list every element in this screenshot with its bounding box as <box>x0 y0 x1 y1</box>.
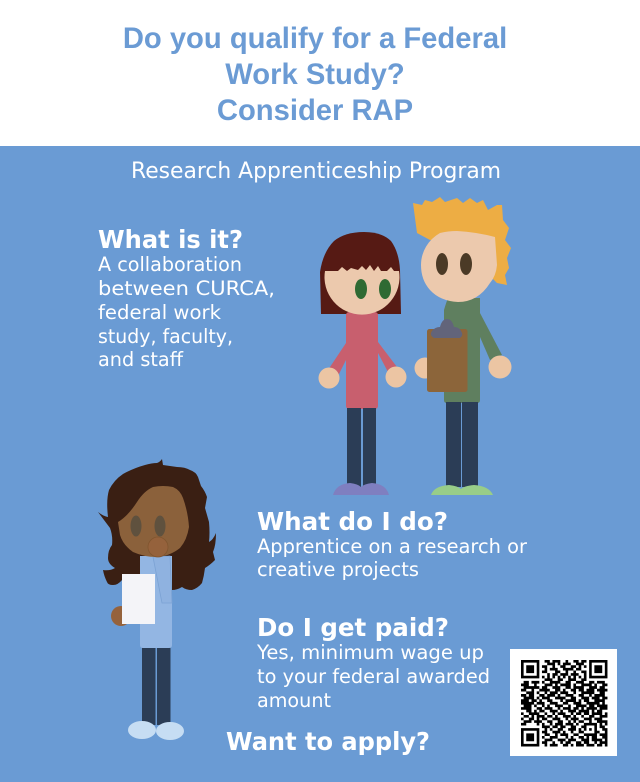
text block: what is it: A collaboration <box>98 253 242 276</box>
text block: what is it: What is it? <box>98 225 243 254</box>
paper <box>122 574 155 624</box>
illustration: woman in red sweater <box>318 232 406 495</box>
text block: do I get paid <box>256 613 490 712</box>
text block: what is it: and staff <box>98 348 184 371</box>
text block: what do I do: Apprentice on a research or <box>257 535 528 558</box>
title: Consider RAP <box>217 95 413 127</box>
icon: clipboard <box>427 319 468 392</box>
illustration: man with clipboard <box>413 197 512 495</box>
QR code <box>510 649 617 756</box>
subtitle: Research Apprenticeship Program <box>131 159 501 184</box>
text block: what is it: federal work <box>98 301 222 324</box>
heading: want to apply: Want to apply? <box>226 727 430 756</box>
text block: what do I do: creative projects <box>257 558 419 581</box>
text block: what do I do <box>257 507 528 581</box>
title: Do you qualify for a Federal <box>123 23 507 55</box>
title <box>123 23 507 127</box>
text block: do I get paid: amount <box>257 689 331 712</box>
text block: do I get paid: to your federal awarded <box>257 665 490 688</box>
text block: what is it <box>98 225 275 371</box>
text block: do I get paid: Do I get paid? <box>257 613 449 642</box>
illustration: woman holding paper <box>98 459 216 740</box>
text block: what do I do: What do I do? <box>257 507 448 536</box>
title: Work Study? <box>225 59 405 91</box>
text block: do I get paid: Yes, minimum wage up <box>256 641 484 664</box>
text block: what is it: between CURCA, <box>98 277 275 300</box>
text block: what is it: study, faculty, <box>98 325 233 348</box>
